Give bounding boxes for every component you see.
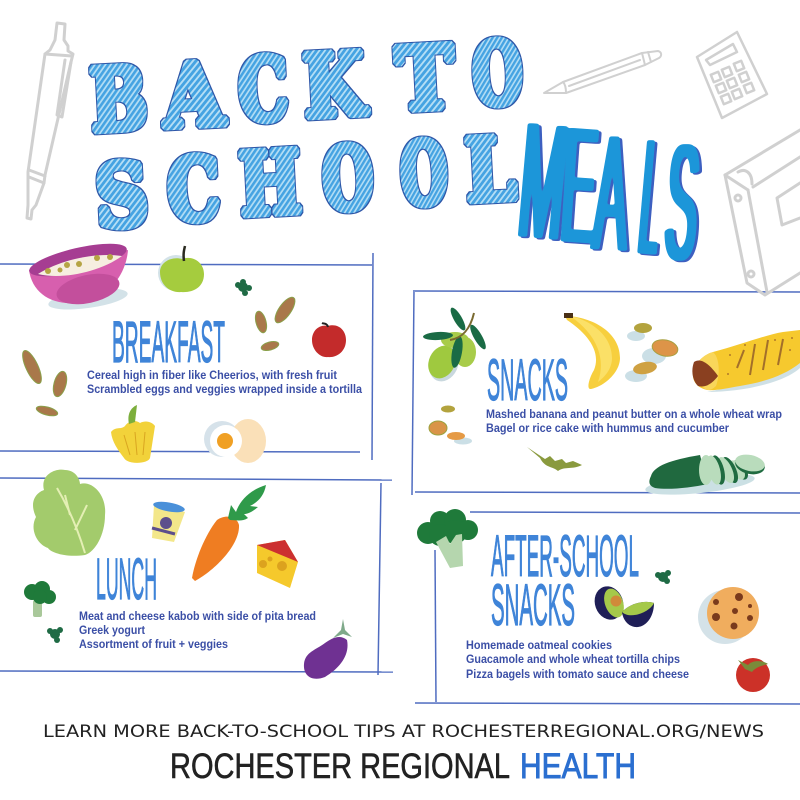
icon: carrot (192, 485, 266, 581)
icon: banana (564, 313, 620, 389)
text block: after-school items: Guacamole and whole wheat tortilla chips (466, 654, 680, 666)
panel: breakfast content: BREAKFAST (112, 310, 225, 375)
icon: cereal bowl (27, 237, 129, 313)
panel: lunch content (24, 470, 352, 679)
title: back to school: A (160, 44, 228, 148)
title: back to school: O (320, 128, 376, 231)
panel: after-school snacks content (417, 509, 770, 692)
panel: snacks content (423, 306, 800, 499)
icon: olives (423, 306, 488, 386)
panel: after-school snacks frame (415, 512, 800, 704)
icon: tomato (736, 658, 770, 692)
panel: lunch frame (0, 478, 393, 675)
text block: snacks items: Mashed banana and peanut butter on a whole wheat wrap (486, 409, 782, 421)
icon: green apple (158, 246, 204, 292)
title: meals (513, 87, 704, 295)
title: meals: L (634, 105, 668, 291)
icon: red apple (312, 323, 346, 357)
icon: eggplant (304, 619, 352, 679)
icon: calculator (697, 32, 767, 118)
footer: logo wordmark: ROCHESTER REGIONAL (170, 747, 510, 786)
text block: after-school items: Homemade oatmeal cookies (466, 640, 612, 652)
icon: cheese (257, 540, 298, 588)
panel: lunch content: LUNCH (96, 547, 157, 612)
icon: binder (725, 130, 800, 295)
title: back to school: C (236, 37, 291, 142)
text block: breakfast items: Cereal high in fiber like Cheerios, with fresh fruit (87, 370, 337, 382)
panel: breakfast frame (0, 253, 373, 460)
text block: lunch items: Greek yogurt (79, 625, 145, 637)
heading: after-school snacks (491, 524, 639, 638)
icon: almonds right (253, 294, 299, 352)
title: meals: A (590, 100, 633, 286)
text block: breakfast items: Scrambled eggs and veggies wrapped inside a tortilla (87, 384, 363, 396)
title: meals: S (661, 109, 704, 295)
text block: after-school items: Pizza bagels with tomato sauce and cheese (466, 669, 689, 681)
icon: almonds left (19, 348, 69, 418)
title: back to school: O (470, 23, 525, 126)
title: back to school: H (237, 132, 304, 236)
icon: large broccoli (417, 509, 478, 568)
panel: snacks frame (412, 290, 800, 495)
icon: mechanical pen (27, 23, 73, 219)
icon: cucumber (644, 452, 767, 499)
panel: breakfast content (19, 237, 363, 463)
heading: after-school snacks: SNACKS (491, 573, 575, 638)
icon: nuts (625, 323, 679, 382)
icon: arugula leaf (527, 447, 582, 471)
icon: small nuts (429, 406, 472, 444)
title: meals: E (557, 92, 602, 278)
title: back to school (88, 23, 525, 247)
footer: logo wordmark: HEALTH (520, 747, 636, 786)
title: back to school: K (301, 33, 370, 138)
icon: cookie (698, 587, 759, 644)
icon: yogurt cup (152, 500, 186, 542)
icon: lettuce (33, 470, 105, 556)
title: back to school: B (88, 49, 150, 152)
icon: fried egg (204, 419, 266, 463)
icon: lunch parsley (47, 627, 63, 643)
text block: snacks items (486, 409, 782, 435)
icon: parsley (235, 279, 252, 296)
text block: after-school items (466, 640, 689, 681)
title: back to school: O (398, 122, 450, 225)
title: back to school: T (394, 27, 457, 131)
icon: avocados (590, 582, 654, 627)
icon: burrito wrap (692, 330, 800, 392)
footer: call to action: LEARN MORE BACK-TO-SCHOOL TIPS AT ROCHESTERREGIONAL.ORG/NEWS (43, 722, 764, 741)
text block: snacks items: Bagel or rice cake with hummus and cucumber (486, 423, 729, 435)
title: back to school: L (463, 118, 518, 222)
text block: lunch items: Assortment of fruit + veggies (79, 639, 228, 651)
icon: yellow pepper (111, 405, 155, 463)
text block: lunch items (79, 611, 316, 651)
icon: small broccoli (24, 581, 56, 617)
text block: breakfast items (87, 370, 363, 396)
title: back to school: C (165, 139, 223, 242)
title: meals: M (513, 87, 573, 275)
text block: lunch items: Meat and cheese kabob with side of pita bread (79, 611, 316, 623)
icon: after parsley (655, 570, 671, 584)
panel: snacks content: SNACKS (487, 348, 568, 413)
title: back to school: S (93, 144, 151, 247)
icon: pencil (544, 51, 661, 93)
